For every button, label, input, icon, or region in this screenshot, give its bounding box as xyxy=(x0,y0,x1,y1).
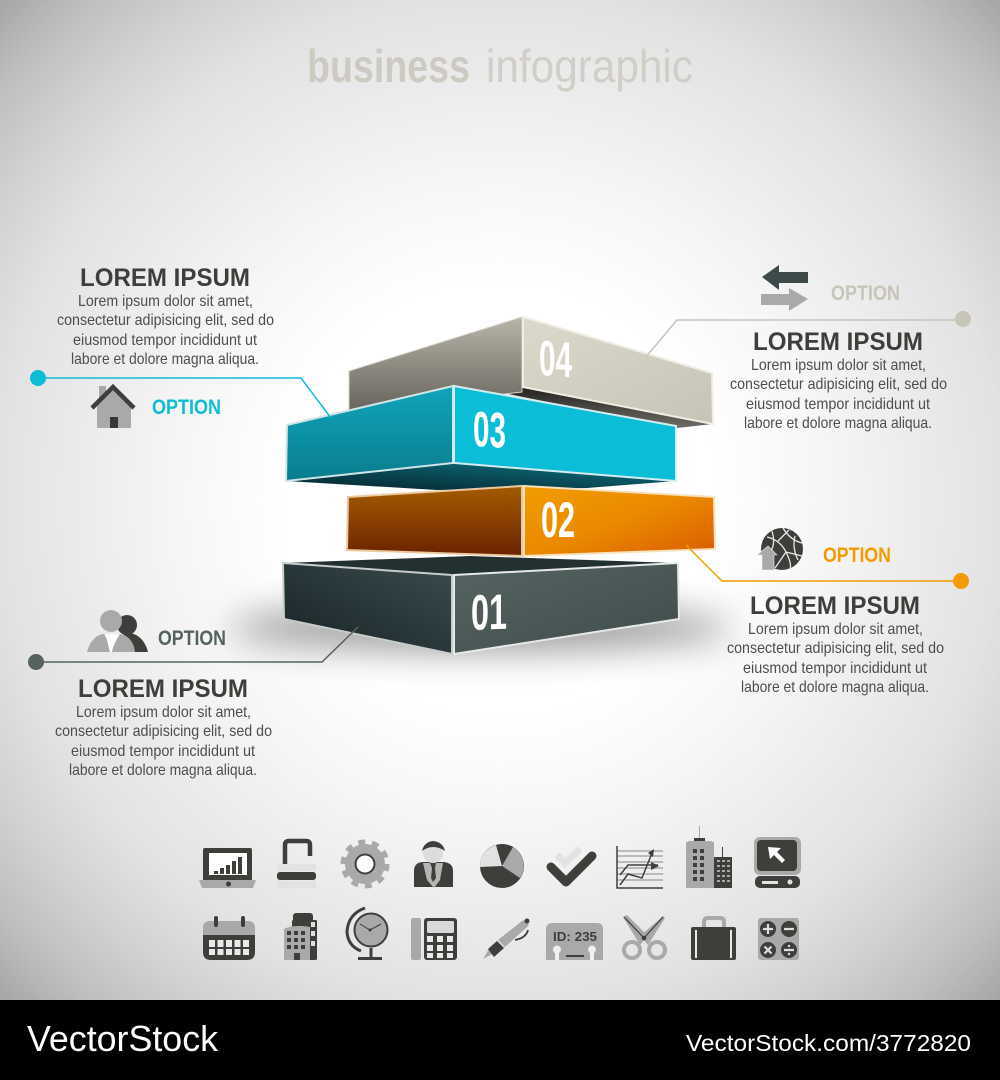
option label: OPTION xyxy=(158,627,226,650)
callout top right: option 04 xyxy=(645,265,971,432)
title xyxy=(307,40,693,92)
body text: consectetur adipisicing elit, sed do xyxy=(57,312,274,329)
body text: labore et dolore magna aliqua. xyxy=(71,351,259,368)
icon: pie chart xyxy=(480,844,524,888)
logo text: VectorStock xyxy=(27,1018,219,1059)
title: business xyxy=(307,40,470,92)
body text: consectetur adipisicing elit, sed do xyxy=(727,640,944,657)
icon: house xyxy=(92,386,134,428)
callout bottom left: option 01 xyxy=(28,610,358,779)
icon: calendar xyxy=(203,916,255,960)
icon set xyxy=(199,826,801,960)
heading: LOREM IPSUM xyxy=(750,592,920,620)
icon: math operations xyxy=(758,918,799,960)
icon: check mark xyxy=(551,849,592,882)
icon: gear xyxy=(343,842,387,886)
icon: scissors xyxy=(623,915,665,958)
body text: Lorem ipsum dolor sit amet, xyxy=(76,704,251,721)
icon: pen xyxy=(483,918,530,959)
body text: eiusmod tempor incididunt ut xyxy=(73,332,257,349)
body text: Lorem ipsum dolor sit amet, xyxy=(751,357,926,374)
icon: id card: ID: 235 xyxy=(553,929,597,944)
option label: OPTION xyxy=(823,544,891,567)
icon: briefcase xyxy=(691,918,736,960)
icon: computer xyxy=(754,837,801,888)
icon: padlock xyxy=(277,841,316,888)
icon: businessman xyxy=(414,841,453,888)
body text xyxy=(55,704,272,779)
body text xyxy=(57,293,274,368)
connector line xyxy=(30,370,331,418)
block 01 xyxy=(283,556,679,654)
connector line xyxy=(686,545,969,589)
body text: consectetur adipisicing elit, sed do xyxy=(55,723,272,740)
body text: labore et dolore magna aliqua. xyxy=(741,679,929,696)
body text: consectetur adipisicing elit, sed do xyxy=(730,376,947,393)
connector line xyxy=(645,311,971,358)
icon: exchange arrows xyxy=(761,265,808,311)
block 04: 04 xyxy=(539,330,572,388)
body text: labore et dolore magna aliqua. xyxy=(744,415,932,432)
body text: eiusmod tempor incididunt ut xyxy=(746,396,930,413)
callout bottom right: option 02 xyxy=(686,528,969,696)
body text: labore et dolore magna aliqua. xyxy=(69,762,257,779)
title: infographic xyxy=(486,40,693,92)
block 04 xyxy=(349,317,713,428)
block 02 xyxy=(347,486,715,556)
option label: OPTION xyxy=(831,282,900,305)
icon: people xyxy=(87,610,148,652)
body text: eiusmod tempor incididunt ut xyxy=(71,743,255,760)
icon: globe clock xyxy=(347,908,388,958)
heading: LOREM IPSUM xyxy=(78,675,248,703)
body text xyxy=(730,357,947,432)
body text: eiusmod tempor incididunt ut xyxy=(743,660,927,677)
icon: calculator xyxy=(411,918,457,960)
connector line xyxy=(28,627,358,670)
floor shadow xyxy=(230,604,730,652)
icon: skyscrapers xyxy=(686,826,732,888)
icon: laptop xyxy=(199,848,256,888)
heading: LOREM IPSUM xyxy=(80,264,250,292)
watermark footer bar xyxy=(0,1000,1000,1080)
icon: line chart xyxy=(617,846,663,888)
body text xyxy=(727,621,944,696)
image id text: VectorStock.com/3772820 xyxy=(686,1030,971,1056)
icon: globe with house xyxy=(757,528,803,570)
body text: Lorem ipsum dolor sit amet, xyxy=(748,621,923,638)
stacked blocks chart xyxy=(283,317,715,654)
heading: LOREM IPSUM xyxy=(753,328,923,356)
body text: Lorem ipsum dolor sit amet, xyxy=(78,293,253,310)
callout top left: option 03 xyxy=(30,264,331,428)
option label: OPTION xyxy=(152,396,221,419)
icon: id card xyxy=(546,923,603,960)
block 03: 03 xyxy=(473,401,506,459)
block 01: 01 xyxy=(471,584,507,641)
block 03 xyxy=(286,386,676,490)
icon: office building xyxy=(284,913,317,960)
block 02: 02 xyxy=(541,492,575,548)
